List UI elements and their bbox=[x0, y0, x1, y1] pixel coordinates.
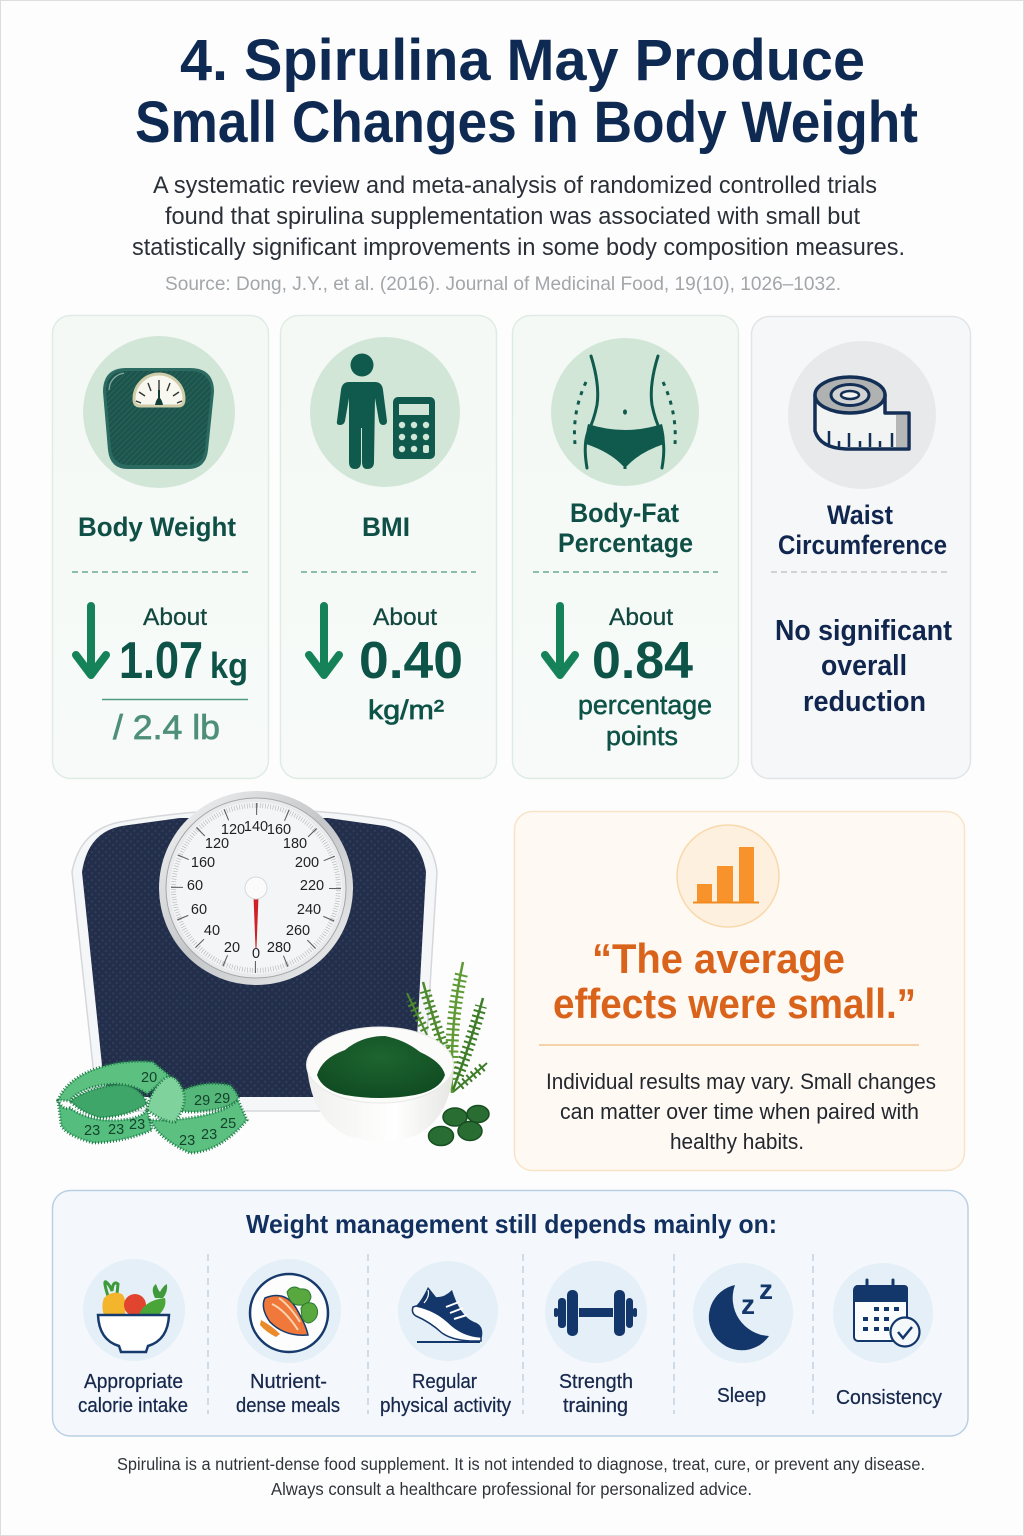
heading: body-fat percentage: Body-Fat bbox=[570, 498, 679, 528]
scale dial: 60 bbox=[187, 878, 203, 894]
panel: BMI bbox=[280, 316, 496, 778]
heading: waist circumference bbox=[778, 500, 947, 560]
note text: healthy habits. bbox=[670, 1129, 804, 1154]
stat: 0.40: 0.40 bbox=[359, 632, 463, 690]
green measuring tape: 25 bbox=[220, 1116, 236, 1132]
scale dial: 260 bbox=[286, 923, 310, 939]
label: dense meals bbox=[236, 1395, 340, 1417]
label bbox=[236, 1371, 340, 1417]
title: Small Changes in Body Weight bbox=[135, 90, 918, 155]
panel: body weight: About bbox=[143, 604, 207, 631]
spirulina tablets bbox=[428, 1106, 489, 1146]
heading: weight management: Weight management still depends mainly on: bbox=[246, 1209, 777, 1239]
icon: waist silhouette bbox=[574, 356, 675, 469]
green measuring tape: 23 bbox=[108, 1122, 124, 1138]
intro text: A systematic review and meta-analysis of randomized controlled trials bbox=[153, 172, 877, 199]
title bbox=[135, 28, 918, 155]
panel: waist circumference bbox=[752, 316, 970, 778]
scale dial: 160 bbox=[267, 822, 291, 838]
note text: Individual results may vary. Small changes bbox=[546, 1069, 936, 1094]
result: no significant reduction: overall bbox=[821, 650, 907, 682]
icon: bar chart bbox=[677, 825, 779, 927]
icon: person and calculator bbox=[337, 354, 435, 469]
label: Consistency bbox=[836, 1387, 942, 1409]
label: physical activity bbox=[380, 1395, 511, 1417]
green measuring tape bbox=[58, 1061, 247, 1153]
heading: waist circumference: Waist bbox=[827, 500, 893, 530]
spirulina sprig bbox=[407, 962, 487, 1093]
scale dial: 60 bbox=[191, 902, 207, 918]
intro text: statistically significant improvements in some body composition measures. bbox=[132, 234, 905, 261]
scale dial bbox=[159, 791, 353, 985]
intro text: found that spirulina supplementation was associated with small but bbox=[165, 203, 860, 230]
result: no significant reduction bbox=[775, 615, 952, 718]
panel: body-fat percentage: About bbox=[609, 604, 673, 631]
arrow: down bbox=[76, 606, 106, 675]
result: no significant reduction: reduction bbox=[803, 686, 926, 718]
heading: body-fat percentage bbox=[558, 498, 693, 558]
scale dial: 240 bbox=[297, 902, 321, 918]
title: 4. Spirulina May Produce bbox=[180, 28, 865, 93]
heading: waist circumference: Circumference bbox=[778, 530, 947, 560]
quote: effects were small.” bbox=[553, 980, 916, 1027]
item: calorie intake bbox=[78, 1259, 188, 1417]
heading: body-fat percentage: Percentage bbox=[558, 528, 693, 558]
icon: bathroom scale bbox=[103, 368, 214, 469]
scale dial: 160 bbox=[191, 855, 215, 871]
item: strength training bbox=[545, 1261, 647, 1417]
result: no significant reduction: No significant bbox=[775, 615, 952, 647]
note text: can matter over time when paired with bbox=[560, 1099, 919, 1124]
scale dial: 220 bbox=[300, 878, 324, 894]
arrow: down bbox=[545, 606, 575, 675]
item: sleep: z bbox=[759, 1274, 773, 1305]
note text bbox=[546, 1069, 936, 1154]
panel: body weight bbox=[52, 316, 268, 778]
scale dial: 140 bbox=[244, 819, 268, 835]
panel: body-fat percentage: percentage bbox=[578, 690, 712, 720]
label: training bbox=[563, 1395, 628, 1417]
label: Strength bbox=[559, 1371, 633, 1393]
intro text bbox=[132, 172, 905, 261]
bowl of spirulina powder bbox=[306, 1027, 454, 1141]
panel: weight management bbox=[52, 1190, 968, 1436]
label: Regular bbox=[412, 1371, 477, 1393]
arrow: down bbox=[309, 606, 339, 675]
panel: body weight: kg bbox=[210, 645, 248, 686]
source citation: Source: Dong, J.Y., et al. (2016). Journal of Medicinal Food, 19(10), 1026–1032. bbox=[165, 273, 841, 295]
scale dial: 120 bbox=[205, 836, 229, 852]
item: sleep: z bbox=[741, 1289, 755, 1320]
label bbox=[78, 1371, 188, 1417]
heading: body weight: Body Weight bbox=[78, 512, 236, 542]
panel: body-fat percentage: points bbox=[606, 721, 678, 751]
scale body bbox=[72, 809, 437, 1111]
panel: BMI: kg/m² bbox=[368, 695, 444, 725]
item: physical activity bbox=[380, 1261, 511, 1417]
footer disclaimer bbox=[117, 1454, 925, 1499]
label: calorie intake bbox=[78, 1395, 188, 1417]
green measuring tape: 23 bbox=[201, 1127, 217, 1143]
scale dial: 180 bbox=[283, 836, 307, 852]
quote bbox=[553, 935, 916, 1027]
quote: “The average bbox=[592, 935, 845, 982]
label: Nutrient- bbox=[250, 1371, 327, 1393]
label: Appropriate bbox=[84, 1371, 183, 1393]
label bbox=[559, 1371, 633, 1417]
item: nutrient-dense meals bbox=[236, 1259, 341, 1417]
label bbox=[380, 1371, 511, 1417]
green measuring tape: 20 bbox=[141, 1070, 157, 1086]
green measuring tape: 29 bbox=[214, 1091, 230, 1107]
scale dial: 20 bbox=[224, 940, 240, 956]
scale dial: 120 bbox=[221, 822, 245, 838]
item: sleep bbox=[693, 1263, 793, 1407]
scale dial: 40 bbox=[204, 923, 220, 939]
panel: BMI: About bbox=[373, 604, 437, 631]
footer disclaimer: Spirulina is a nutrient-dense food supplement. It is not intended to diagnose, treat, cure, or prevent any disease. bbox=[117, 1454, 925, 1474]
label: Sleep bbox=[717, 1385, 766, 1407]
stat: 1.07 kg: 1.07 bbox=[119, 632, 203, 690]
scale dial: 0 bbox=[252, 946, 260, 962]
green measuring tape: 23 bbox=[179, 1133, 195, 1149]
panel: body-fat percentage bbox=[512, 316, 738, 778]
scale dial: 200 bbox=[295, 855, 319, 871]
scale dial: 280 bbox=[267, 940, 291, 956]
green measuring tape: 23 bbox=[129, 1117, 145, 1133]
illustration: scale with tape, spirulina powder and tablets bbox=[58, 791, 489, 1153]
green measuring tape: 29 bbox=[194, 1093, 210, 1109]
green measuring tape: 23 bbox=[84, 1123, 100, 1139]
stat: 2.4 lb: / 2.4 lb bbox=[113, 709, 220, 747]
panel: quote callout bbox=[514, 812, 964, 1170]
icon: tape measure bbox=[815, 377, 909, 449]
heading: BMI: BMI bbox=[362, 512, 410, 542]
footer disclaimer: Always consult a healthcare professional for personalized advice. bbox=[271, 1479, 752, 1499]
item: consistency bbox=[833, 1263, 942, 1409]
stat: 0.84: 0.84 bbox=[592, 632, 693, 690]
